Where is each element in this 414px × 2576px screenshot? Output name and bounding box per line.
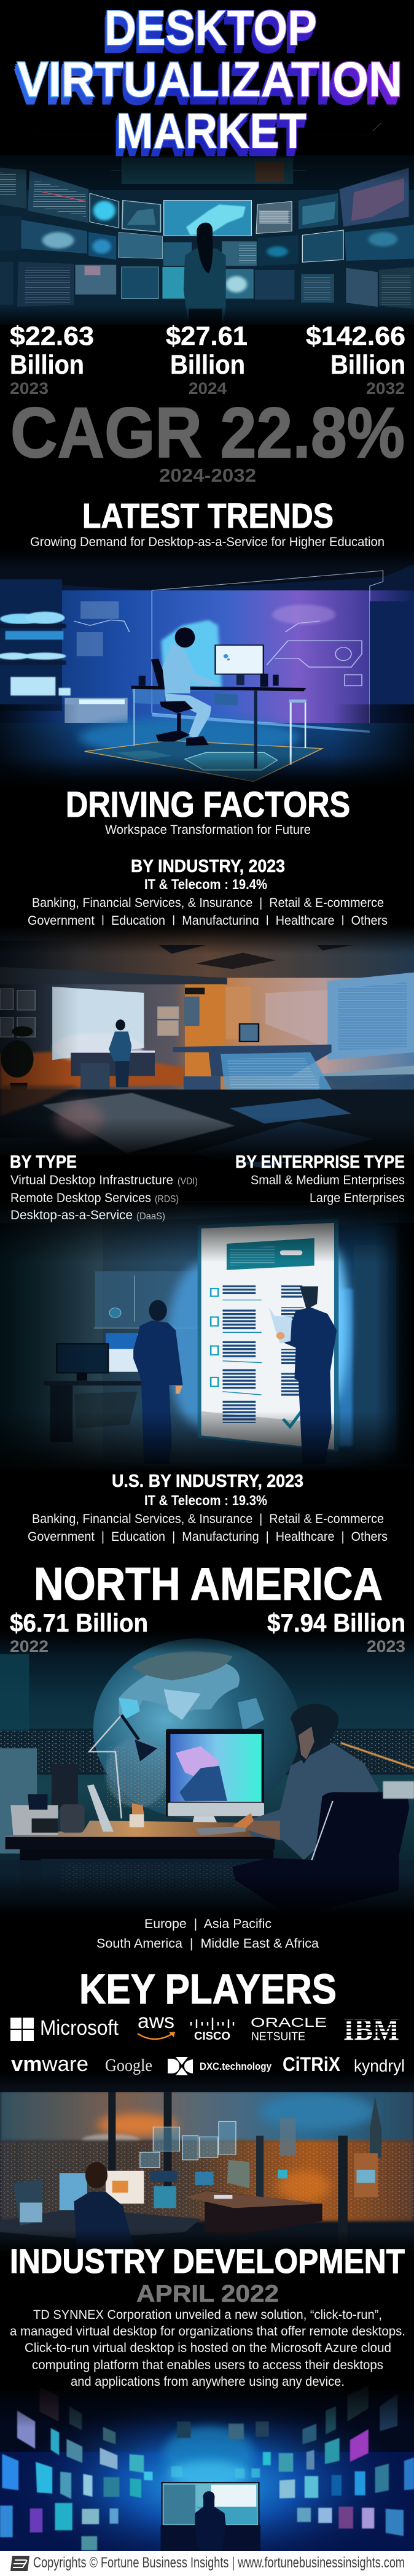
logo: cisco: CISCO <box>194 2030 230 2042</box>
paragraph: industry development <box>10 2308 405 2389</box>
other regions list <box>96 1917 319 1951</box>
hologram blueprint <box>221 1052 335 1124</box>
stat: 2024 market size: Billion <box>170 350 245 380</box>
logo: DXC technology: DXC.technology <box>200 2061 271 2072</box>
floor <box>0 723 414 793</box>
panel: by type <box>10 1152 198 1222</box>
logo: Oracle NetSuite: NETSUITE <box>251 2030 305 2043</box>
title: MARKET <box>115 106 305 161</box>
logo: kyndryl: kyndryl <box>354 2056 405 2075</box>
panel: by type: Remote Desktop Services <box>10 1191 151 1205</box>
figure: man at window <box>109 1019 131 1087</box>
scene: technician at desk in blue holographic room <box>0 549 414 794</box>
panel: by type: (DaaS) <box>136 1211 165 1222</box>
monitor <box>240 1024 259 1041</box>
stat: north america 2023 <box>267 1608 405 1656</box>
segment: by industry 2023: Government | Education | Manufacturing | Healthcare | Others <box>28 914 388 928</box>
checklist board <box>198 1219 338 1452</box>
panel: by enterprise type: Large Enterprises <box>310 1191 405 1205</box>
paragraph: industry development: Click-to-run virtual desktop is hosted on the Microsoft Azure cloud <box>25 2341 391 2355</box>
stat: 2024 market size: 2024 <box>189 379 227 398</box>
stat: 2032 market size: Billion <box>330 350 405 380</box>
wall frames <box>0 989 179 1037</box>
footer <box>0 2551 414 2576</box>
stat: 2024 market size <box>166 322 248 398</box>
desk <box>6 1784 275 1903</box>
paragraph: industry development: computing platform that enables users to access their desktops <box>32 2358 383 2372</box>
figure: seated analyst <box>74 2162 135 2250</box>
cabinet <box>64 698 128 723</box>
panel: by enterprise type: Small & Medium Enterprises <box>251 1173 405 1187</box>
scene: control room with wall of screens <box>0 123 414 328</box>
logo: aws: aws <box>138 2010 174 2032</box>
paragraph: industry development: TD SYNNEX Corporation unveiled a new solution, “click-to-run”, <box>33 2308 382 2322</box>
wall circuitry <box>74 620 362 685</box>
computer <box>166 1729 264 1827</box>
floating screens <box>0 2385 414 2550</box>
globe <box>93 1638 300 1819</box>
monitor and stand <box>160 2483 260 2551</box>
segment: US by industry 2023: IT & Telecom : 19.3% <box>144 1492 267 1508</box>
figure: man at computer <box>232 1704 409 1917</box>
segment: by industry 2023: BY INDUSTRY, 2023 <box>131 857 285 876</box>
date: april 2022: APRIL 2022 <box>136 2281 279 2307</box>
stat: 2023 market size <box>10 322 94 398</box>
figure: seated technician <box>151 627 219 746</box>
scene: analyst in skyline office <box>0 2072 414 2254</box>
other regions list: Europe | Asia Pacific <box>144 1917 271 1931</box>
shelves <box>0 612 71 696</box>
title: VIRTUALIZATION <box>15 57 399 112</box>
paragraph: industry development: and applications from anywhere using any device. <box>71 2375 345 2389</box>
glowing backdrop <box>161 620 222 689</box>
stat: north america 2022 <box>10 1608 148 1656</box>
stat: north america 2023: 2023 <box>367 1637 405 1656</box>
logo: vmware: vmware <box>11 2053 88 2076</box>
floor <box>0 1090 414 1155</box>
title: DESKTOP <box>104 1 317 56</box>
title: MARKET <box>114 111 304 166</box>
desktop monitors <box>44 1333 144 1442</box>
logo: cisco <box>191 2018 233 2042</box>
panel: by type: Desktop-as-a-Service <box>10 1208 133 1222</box>
title: DESKTOP <box>104 3 315 58</box>
stat: 2023 market size: Billion <box>10 350 84 380</box>
title: DESKTOP <box>103 8 314 63</box>
subheading: latest trend: Growing Demand for Desktop-as-a-Service for Higher Education <box>30 535 385 549</box>
other regions list: South America | Middle East & Africa <box>96 1937 319 1951</box>
paragraph: industry development: a managed virtual desktop for organizations that offer remote desktops. <box>10 2324 405 2339</box>
stat: 2023 market size: $22.63 <box>10 322 94 351</box>
stat: 2032 market size: 2032 <box>366 379 405 398</box>
panel: by type: (VDI) <box>178 1176 198 1187</box>
stat: north america 2023: $7.94 Billion <box>267 1608 405 1637</box>
logo: Microsoft: Microsoft <box>40 2016 119 2040</box>
segment: US by industry 2023: Government | Education | Manufacturing | Healthcare | Others <box>28 1530 388 1544</box>
title: DESKTOP <box>103 6 314 61</box>
scene: analyst with globe and city at night <box>0 1628 414 1917</box>
subheading: driving factor: Workspace Transformation for Future <box>105 823 311 837</box>
stat: north america 2022: 2022 <box>10 1637 49 1656</box>
window <box>52 987 144 1060</box>
panel: by type: Virtual Desktop Infrastructure <box>10 1173 173 1187</box>
logo: Google: Google <box>105 2056 152 2075</box>
logo: Oracle NetSuite <box>251 2016 327 2043</box>
stat: 2032 market size <box>306 322 405 398</box>
panel: by type: (RDS) <box>155 1194 179 1205</box>
scene: office with window and blueprint hologram <box>0 925 414 1168</box>
logo: Microsoft <box>10 2016 119 2041</box>
monitor <box>139 645 279 687</box>
segment: US by industry 2023 <box>28 1471 388 1544</box>
lamp <box>89 1715 157 1818</box>
hologram wall <box>327 973 414 1060</box>
panel: by type: BY TYPE <box>10 1152 77 1172</box>
logo: Oracle NetSuite: ORACLE <box>251 2016 327 2030</box>
heading: key players: KEY PLAYERS <box>79 1965 337 2013</box>
desks <box>71 1044 414 1120</box>
heading: north america: NORTH AMERICA <box>34 1558 383 1610</box>
logo: DXC technology <box>168 2057 271 2075</box>
scene: two businessmen at checklist board <box>0 1201 414 1473</box>
segment: by industry 2023: Banking, Financial Services, & Insurance | Retail & E-commerce <box>32 896 384 910</box>
stat: 2032 market size: $142.66 <box>306 322 405 351</box>
figure: left businessman <box>133 1300 183 1464</box>
title <box>15 1 402 166</box>
figure: person from behind <box>195 2491 226 2551</box>
figure: woman silhouette <box>184 223 226 328</box>
workstation left <box>0 2171 213 2239</box>
title: MARKET <box>114 109 305 164</box>
heading: latest trends: LATEST TRENDS <box>82 496 334 536</box>
logo: IBM: IBM <box>343 2012 399 2046</box>
figure: right businessman <box>269 1286 337 1464</box>
title: MARKET <box>116 104 307 159</box>
panel: by enterprise type <box>235 1152 405 1205</box>
desk <box>131 685 307 768</box>
logo: Citrix: CiTRiX <box>283 2053 341 2075</box>
icon: Fortune Business Insights logo <box>10 2556 29 2571</box>
CAGR period: 2024-2032 <box>159 465 256 486</box>
stat: 2023 market size: 2023 <box>10 379 49 398</box>
floor mat <box>85 741 322 781</box>
heading: driving factors: DRIVING FACTORS <box>66 785 350 825</box>
plant <box>1 1026 34 1098</box>
stat: north america 2022: $6.71 Billion <box>10 1608 148 1637</box>
segment: by industry 2023 <box>28 857 388 928</box>
title: VIRTUALIZATION <box>15 60 399 115</box>
segment: US by industry 2023: Banking, Financial Services, & Insurance | Retail & E-commerce <box>32 1512 384 1526</box>
segment: US by industry 2023: U.S. BY INDUSTRY, 2023 <box>112 1471 303 1491</box>
segment: by industry 2023: IT & Telecom : 19.4% <box>144 876 267 892</box>
workstation right <box>185 2160 322 2237</box>
scene: person facing wall of floating screens <box>0 2378 414 2572</box>
holographic panels <box>140 2121 236 2167</box>
stat: 2024 market size: $27.61 <box>166 322 248 351</box>
